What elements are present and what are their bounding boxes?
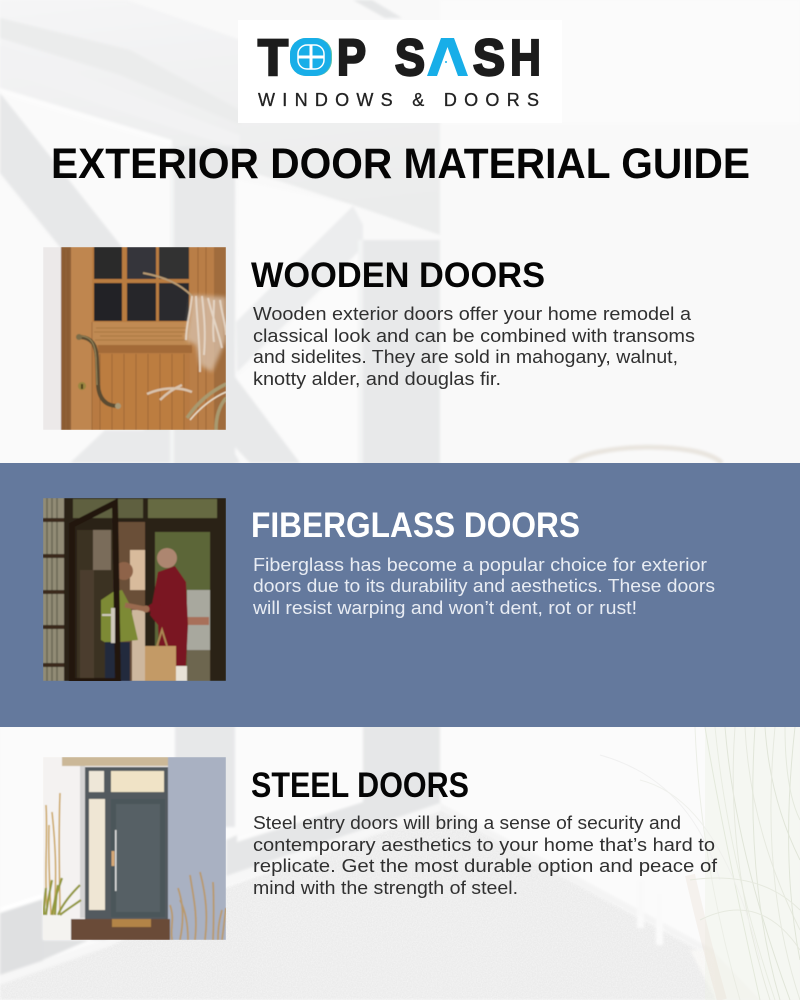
panel: wooden doors — [43, 247, 695, 430]
text: fiberglass doors description — [252, 555, 715, 618]
panel: steel doors — [43, 757, 718, 940]
text: steel doors description: contemporary aesthetics to your home that’s hard to — [253, 835, 715, 855]
text: steel doors description: replicate. Get the most durable option and peace of — [253, 856, 718, 876]
heading: fiberglass doors: FIBERGLASS DOORS — [251, 506, 580, 545]
photo: wooden door — [43, 247, 226, 430]
logo: TOP wordmark — [258, 29, 366, 86]
text: wooden doors description: classical look and can be combined with transoms — [253, 326, 695, 346]
text: wooden doors description: and sidelites. They are sold in mahogany, walnut, — [253, 347, 678, 367]
text: wooden doors description — [253, 304, 695, 389]
photo: steel door — [43, 757, 226, 940]
panel: fiberglass doors — [0, 463, 800, 727]
photo: fiberglass door with two men — [43, 498, 226, 681]
logo: SASH wordmark: S — [395, 29, 425, 86]
logo: SASH wordmark: S — [473, 29, 505, 86]
text: fiberglass doors description: will resist warping and won’t dent, rot or rust! — [252, 598, 637, 618]
title: EXTERIOR DOOR MATERIAL GUIDE — [51, 140, 750, 188]
heading: wooden doors: WOODEN DOORS — [251, 256, 545, 295]
text: fiberglass doors description: Fiberglass has become a popular choice for exterior — [253, 555, 707, 575]
text: steel doors description: Steel entry doors will bring a sense of security and — [253, 813, 681, 833]
logo — [238, 20, 562, 123]
logo: TOP wordmark: T — [258, 29, 288, 86]
heading: steel doors: STEEL DOORS — [251, 766, 469, 805]
text: wooden doors description: knotty alder, and douglas fir. — [253, 369, 501, 389]
text: steel doors description: mind with the strength of steel. — [253, 878, 518, 898]
logo: tagline: WINDOWS & DOORS — [258, 90, 539, 110]
text: fiberglass doors description: doors due to its durability and aesthetics. These doors — [253, 576, 715, 596]
grass — [600, 727, 800, 1000]
logo: SASH wordmark: H — [510, 29, 541, 86]
text: steel doors description — [253, 813, 718, 898]
logo: SASH wordmark — [395, 29, 541, 86]
text: wooden doors description: Wooden exterior doors offer your home remodel a — [253, 304, 692, 324]
logo: TOP wordmark: P — [337, 29, 366, 86]
